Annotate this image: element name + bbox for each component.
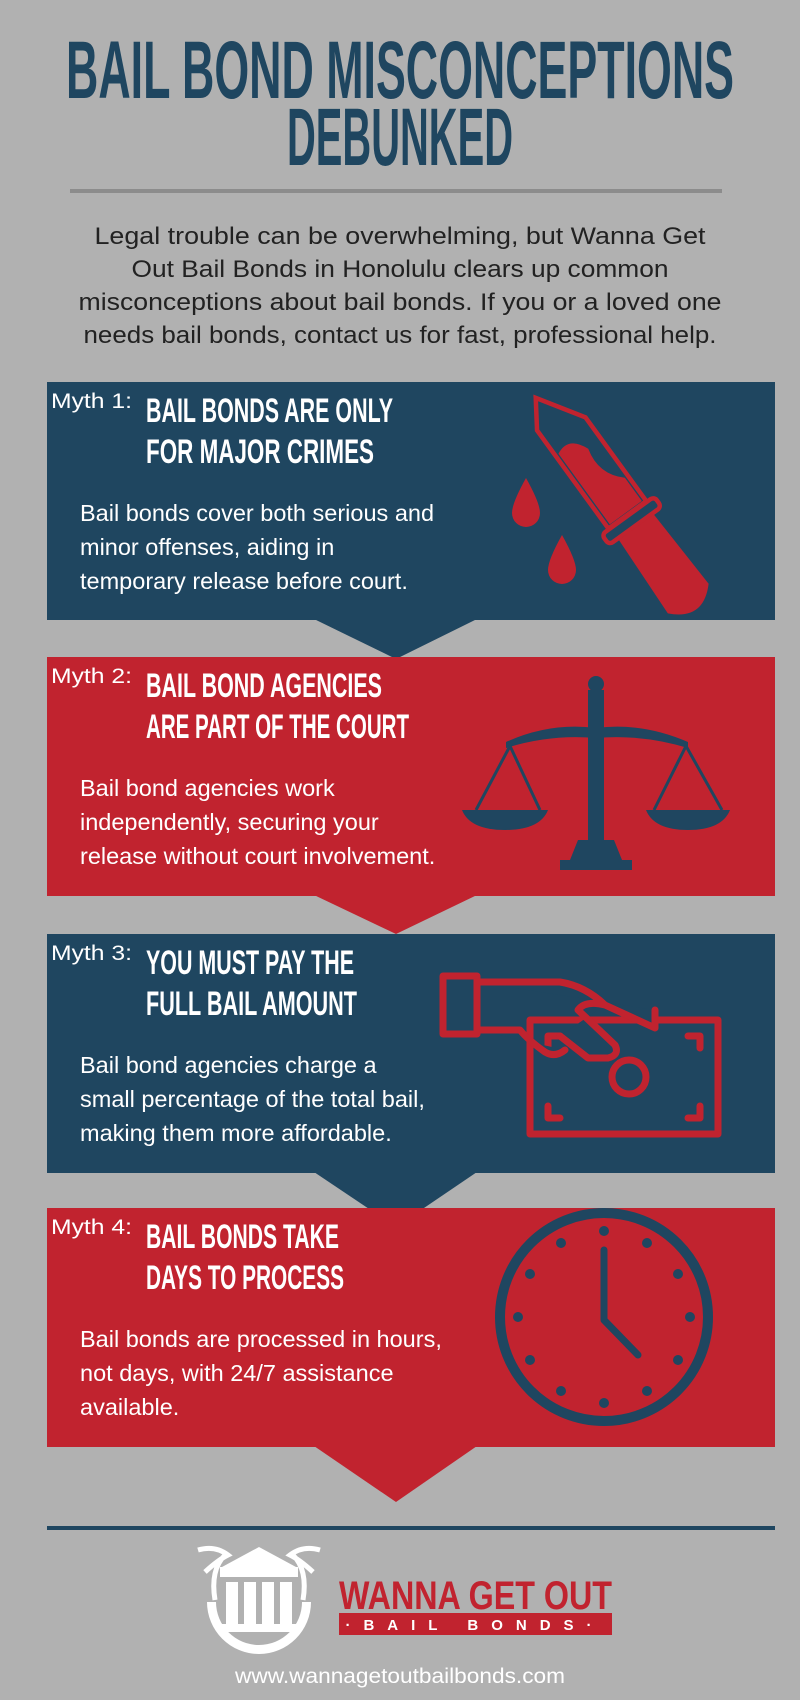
icon: clock — [500, 1213, 708, 1421]
panel: myth 1: Myth 1: — [51, 390, 132, 413]
panel: myth 1: temporary release before court. — [80, 568, 408, 594]
intro text: misconceptions about bail bonds. If you or a loved one — [78, 289, 722, 316]
panel: myth 1: Bail bonds cover both serious and — [80, 500, 434, 526]
panel: myth 1: FOR MAJOR CRIMES — [146, 433, 374, 471]
intro text: needs bail bonds, contact us for fast, professional help. — [84, 322, 716, 349]
panel: myth 2 — [47, 657, 775, 934]
icon: hand with money — [443, 976, 718, 1134]
panel: myth 4 — [47, 1208, 775, 1502]
panel: myth 3 — [47, 934, 775, 1227]
panel: myth 3: FULL BAIL AMOUNT — [146, 985, 357, 1023]
panel: myth 2: Myth 2: — [51, 665, 132, 688]
intro text — [78, 223, 722, 349]
panel: myth 3: Myth 3: — [51, 942, 132, 965]
icon: scales of justice — [462, 676, 730, 870]
intro text: Legal trouble can be overwhelming, but Wanna Get — [94, 223, 706, 250]
url: www.wannagetoutbailbonds.com — [234, 1665, 565, 1688]
panel: myth 3: small percentage of the total bail, — [80, 1086, 425, 1112]
panel: myth 4: DAYS TO PROCESS — [146, 1259, 344, 1297]
icon: columns with palms — [198, 1547, 320, 1654]
title: DEBUNKED — [287, 92, 513, 183]
panel: myth 3: YOU MUST PAY THE — [146, 944, 354, 982]
panel: myth 2: independently, securing your — [80, 809, 379, 835]
logo: WANNA GET OUT — [339, 1574, 612, 1618]
panel: myth 3: making them more affordable. — [80, 1120, 392, 1146]
panel: myth 4: Bail bonds are processed in hours, — [80, 1326, 442, 1352]
panel: myth 2: ARE PART OF THE COURT — [146, 708, 409, 746]
panel: myth 2: Bail bond agencies work — [80, 775, 335, 801]
panel: myth 2: BAIL BOND AGENCIES — [146, 667, 382, 705]
panel: myth 3: Bail bond agencies charge a — [80, 1052, 378, 1078]
panel: myth 4: Myth 4: — [51, 1216, 132, 1239]
panel: myth 2: release without court involvement. — [80, 843, 435, 869]
title — [66, 25, 734, 183]
panel: myth 1: BAIL BONDS ARE ONLY — [146, 392, 393, 430]
panel: myth 4: BAIL BONDS TAKE — [146, 1218, 339, 1256]
icon: bloody knife — [514, 376, 722, 629]
logo: ·BAIL BONDS· — [345, 1617, 605, 1634]
logo — [198, 1547, 612, 1654]
panel: myth 1: minor offenses, aiding in — [80, 534, 334, 560]
panel: myth 1 — [47, 376, 775, 659]
panel: myth 4: not days, with 24/7 assistance — [80, 1360, 394, 1386]
intro text: Out Bail Bonds in Honolulu clears up common — [132, 256, 668, 283]
panel: myth 4: available. — [80, 1394, 179, 1420]
